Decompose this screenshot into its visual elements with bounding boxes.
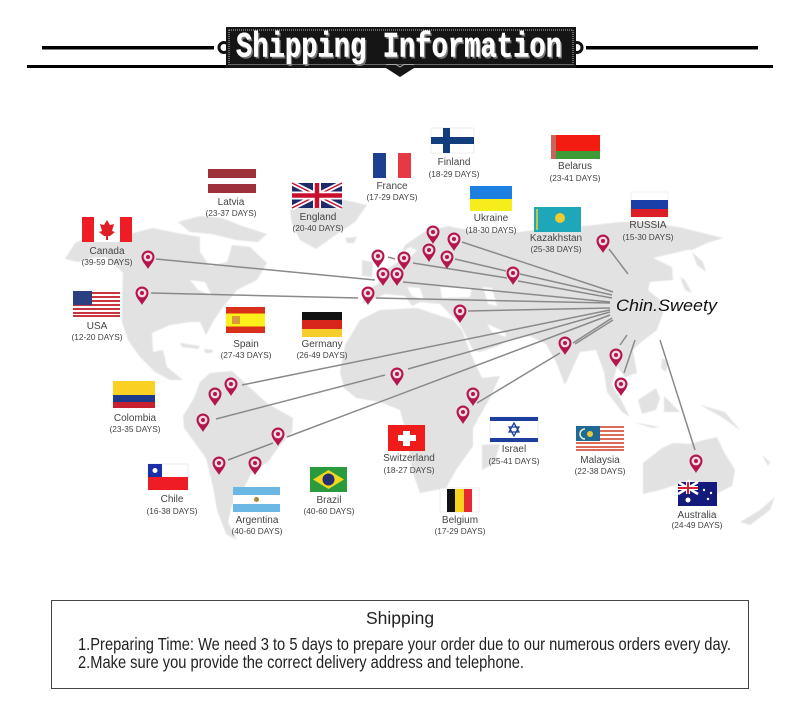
country: Russia [622, 192, 674, 242]
country: Finland: (18-29 DAYS) [428, 169, 480, 179]
location pins [136, 226, 702, 475]
country: Belgium: Belgium [442, 515, 478, 526]
country: USA: (12-20 DAYS) [71, 332, 123, 342]
country: Russia: RUSSIA [629, 220, 667, 231]
country: Kazakhstan: Kazakhstan [530, 233, 582, 244]
country: Australia: Australia [678, 510, 717, 521]
country: Colombia [109, 381, 161, 434]
country: Australia [671, 482, 723, 530]
country: Spain [220, 307, 272, 360]
country: Switzerland: (18-27 DAYS) [383, 465, 435, 475]
country: Belgium: (17-29 DAYS) [434, 526, 486, 536]
country: Germany: (26-49 DAYS) [296, 350, 348, 360]
country: Brazil: Brazil [316, 495, 342, 506]
title banner: Shipping Information [236, 28, 562, 68]
country: Ukraine [465, 186, 517, 235]
country: Spain: (27-43 DAYS) [220, 350, 272, 360]
country: Belarus: Belarus [558, 161, 592, 172]
hub label: Chin.Sweety [616, 296, 719, 315]
country: Latvia: Latvia [218, 197, 245, 208]
country: Germany [296, 312, 348, 360]
title banner [27, 27, 773, 77]
country: USA: USA [87, 321, 108, 332]
shipping info box [52, 600, 748, 688]
country: Colombia: (23-35 DAYS) [109, 424, 161, 434]
country: Kazakhstan: (25-38 DAYS) [530, 244, 582, 254]
country: USA [71, 291, 123, 342]
country: France: (17-29 DAYS) [366, 192, 418, 202]
country: Malaysia: Malaysia [580, 455, 620, 466]
country: France [366, 153, 418, 202]
country: England: England [300, 212, 336, 223]
country: Latvia: (23-37 DAYS) [205, 208, 257, 218]
country: Kazakhstan [530, 207, 582, 254]
country: Malaysia [574, 426, 626, 476]
country: Argentina [231, 487, 283, 536]
title banner: Shipping Information [238, 30, 564, 70]
country: England: (20-40 DAYS) [292, 223, 344, 233]
country: Malaysia: (22-38 DAYS) [574, 466, 626, 476]
country: Israel: (25-41 DAYS) [488, 456, 540, 466]
country: Latvia [205, 169, 257, 218]
country: Brazil [303, 467, 355, 516]
country: Argentina: Argentina [236, 515, 279, 526]
country: Germany: Germany [301, 339, 343, 350]
country: Canada: (39-59 DAYS) [81, 257, 133, 267]
country: Chile: Chile [161, 494, 184, 505]
country: Brazil: (40-60 DAYS) [303, 506, 355, 516]
country: Belarus [549, 135, 601, 183]
country: Finland [428, 128, 480, 179]
country: Canada: Canada [89, 246, 125, 257]
country: Switzerland [383, 425, 435, 475]
country: Israel [488, 417, 540, 466]
country: Canada [81, 217, 133, 267]
country: Ukraine: Ukraine [474, 213, 509, 224]
country: Australia: (24-49 DAYS) [671, 520, 723, 530]
country: Russia: (15-30 DAYS) [622, 232, 674, 242]
country: Colombia: Colombia [114, 413, 157, 424]
country: Switzerland: Switzerland [383, 453, 435, 464]
country: Belgium [434, 488, 486, 536]
world map [65, 200, 775, 540]
shipping info box: 2.Make sure you provide the correct delivery address and telephone. [78, 652, 524, 672]
seas and lakes [190, 244, 506, 337]
country: Belarus: (23-41 DAYS) [549, 173, 601, 183]
country: Spain: Spain [233, 339, 259, 350]
country: Ukraine: (18-30 DAYS) [465, 225, 517, 235]
country: Finland: Finland [438, 157, 470, 168]
country: Israel: Israel [502, 444, 526, 455]
connection lines [151, 242, 695, 460]
country: Argentina: (40-60 DAYS) [231, 526, 283, 536]
country: Chile [146, 464, 198, 516]
country: England [292, 183, 344, 233]
shipping info box: Shipping [366, 608, 434, 628]
country: France: France [376, 181, 408, 192]
country: Chile: (16-38 DAYS) [146, 506, 198, 516]
